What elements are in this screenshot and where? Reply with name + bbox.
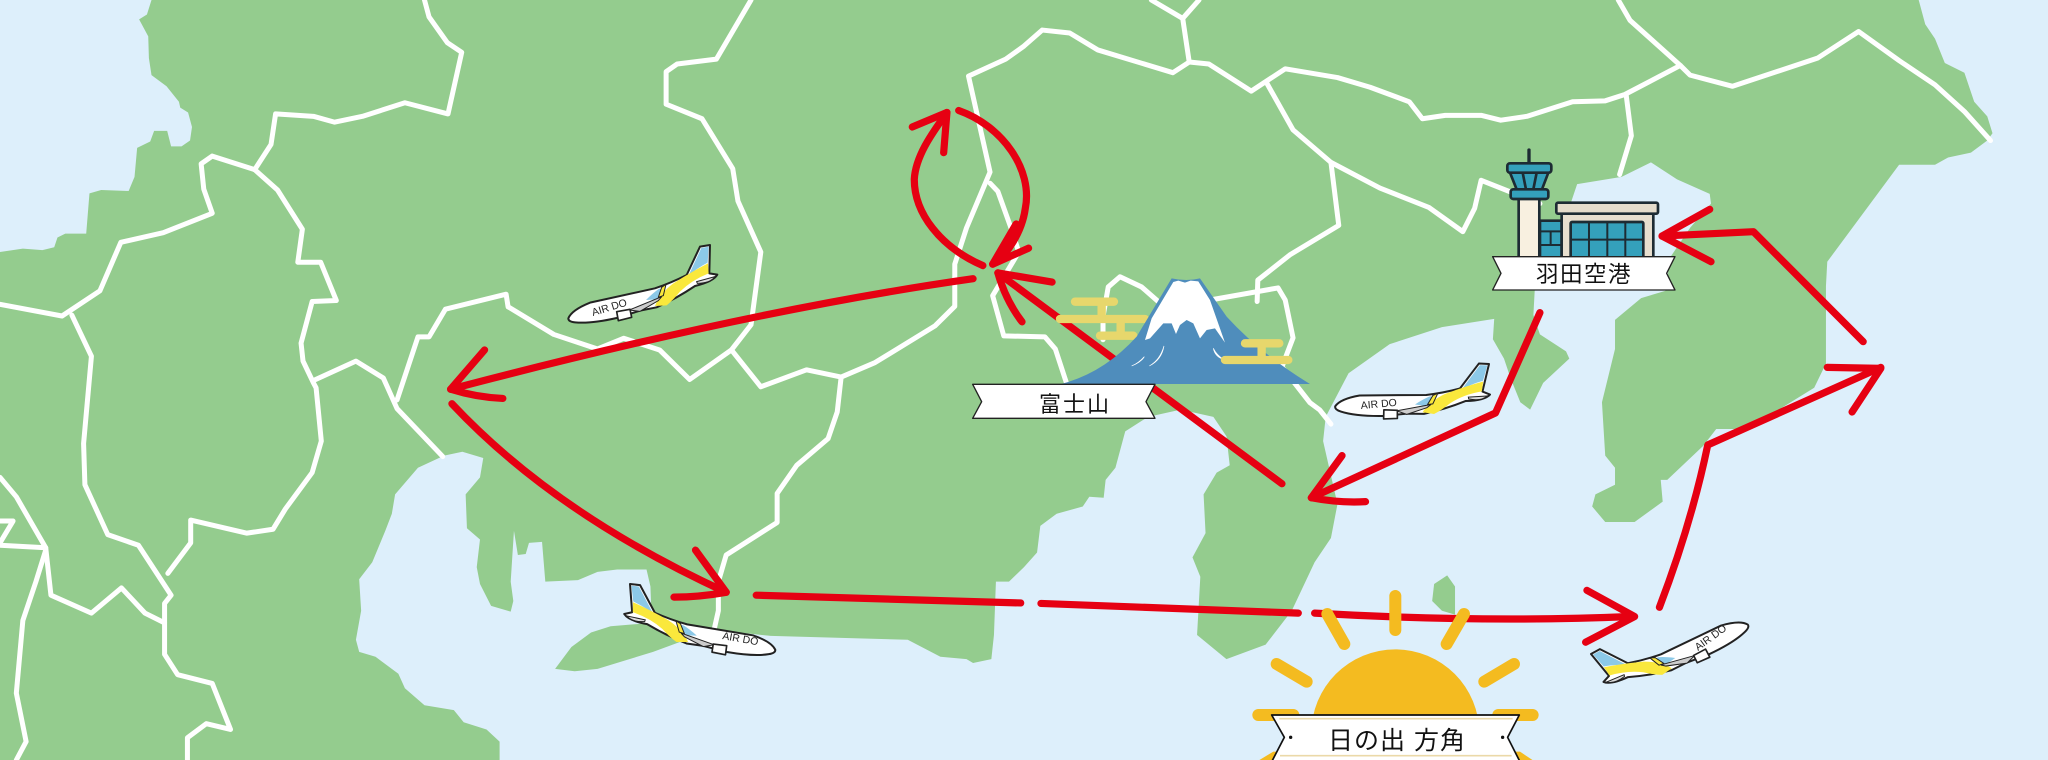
sea: Sea of Japan corner	[0, 0, 192, 252]
cloud: left of Fuji	[1060, 302, 1145, 336]
icon: rising sun	[1257, 596, 1535, 760]
label banner: Haneda airport	[1493, 257, 1675, 290]
control tower	[1507, 150, 1551, 258]
plane: off Atsumi	[623, 577, 776, 662]
arrow: Fuji to Nagoya side	[451, 279, 973, 398]
arrow: Izu to Fuji	[998, 273, 1282, 484]
label banner: sunrise direction: 日の出 方角	[1328, 727, 1466, 755]
cloud: right of Fuji	[1225, 343, 1288, 360]
arrow: loop right side	[959, 111, 1029, 264]
arrow: up to Boso east	[1659, 367, 1881, 607]
icon: Mount Fuji	[1060, 278, 1310, 384]
island: Izu Oshima	[1432, 575, 1455, 615]
plane: Sagami Bay: AIR DO	[1360, 397, 1397, 412]
flight route: red arrows	[451, 111, 1881, 642]
arrow: eastward over the sea	[756, 590, 1635, 642]
label banner: sunrise direction	[1270, 715, 1522, 760]
terminal building	[1556, 203, 1658, 257]
plane: off Atsumi: AIR DO	[721, 630, 759, 648]
arrow: down to Chubu coast	[452, 404, 726, 597]
arrow: loop left side	[912, 112, 983, 266]
plane: over Nagano: AIR DO	[590, 297, 628, 319]
plane: over Nagano	[568, 245, 717, 323]
mountain body	[1061, 278, 1310, 384]
plane: Sagami Bay	[1334, 335, 1496, 442]
annex	[1540, 221, 1562, 257]
label banner: Mount Fuji: 富士山	[1039, 392, 1111, 417]
arrow: Haneda to Izu	[1311, 313, 1540, 502]
plane: climbing off Boso: AIR DO	[1693, 622, 1729, 653]
arrow: to Haneda	[1662, 209, 1863, 342]
plane: climbing off Boso	[1585, 567, 1750, 720]
label banner: Mount Fuji	[973, 384, 1155, 418]
icon: Haneda airport	[1507, 150, 1658, 258]
snow cap	[1145, 281, 1225, 343]
label banner: Haneda airport: 羽田空港	[1536, 262, 1632, 287]
